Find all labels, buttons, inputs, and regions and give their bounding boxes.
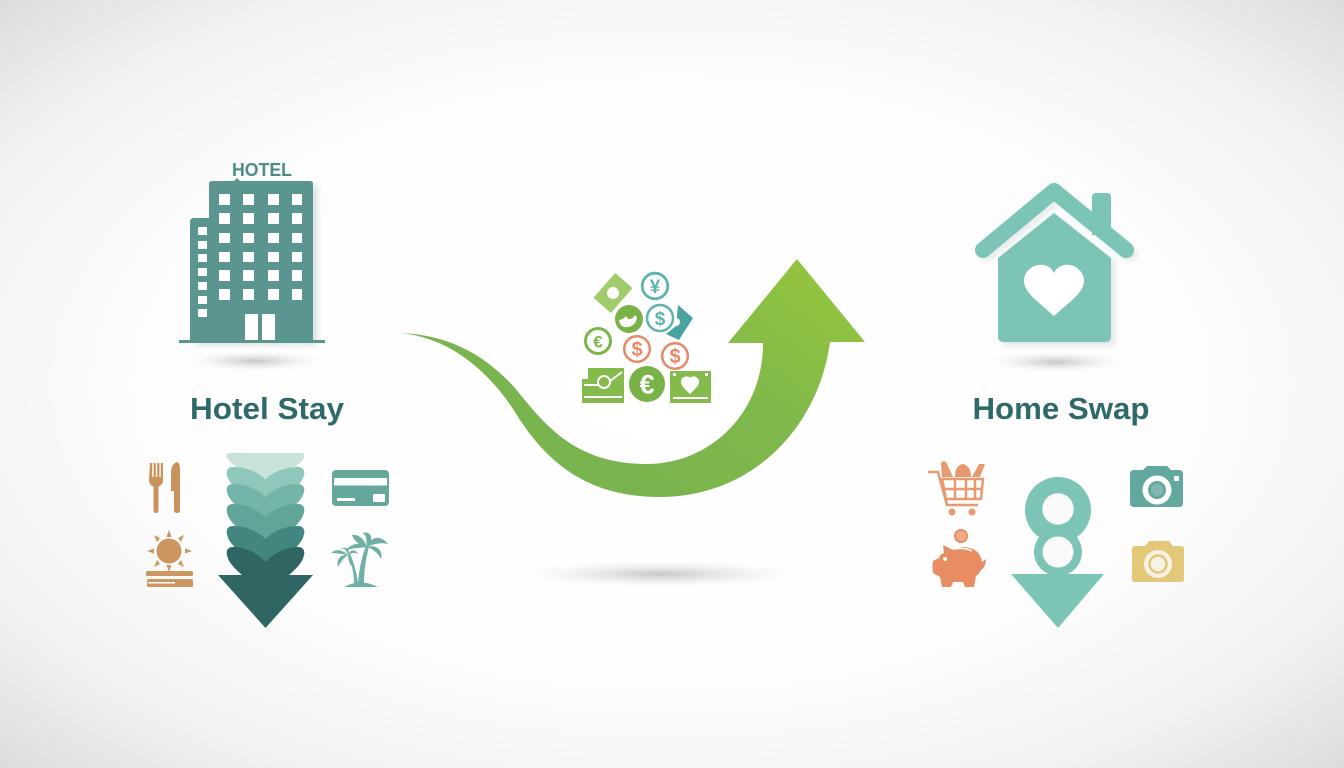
icon: dollar coin teal: $: [655, 309, 666, 330]
icon: palm trees: [331, 532, 388, 587]
panel: hotel stay: [146, 160, 389, 628]
icon group: money and currency: [582, 273, 711, 403]
arrow: rising curved savings arrow: [400, 259, 865, 587]
heading: home swap: Home Swap: [972, 391, 1150, 426]
icon: descending looped arrow: [1011, 477, 1104, 628]
icon: euro coin outline: €: [593, 332, 603, 352]
icon: euro coin solid: €: [639, 370, 655, 400]
icon: piggy bank: [932, 530, 986, 587]
icon: yellow camera: [1132, 541, 1184, 582]
icon: diamond banknote: [593, 273, 633, 313]
icon: dollar coin orange right: $: [669, 346, 681, 368]
icon: shopping cart: [928, 461, 985, 516]
icon: teal banknote: [666, 305, 693, 340]
icon: fork and knife: [149, 462, 180, 513]
icon: hotel building: HOTEL: [232, 160, 292, 180]
icon: house with heart: [983, 191, 1130, 372]
icon: dollar coin orange: $: [631, 339, 643, 361]
icon: teal camera: [1130, 466, 1183, 507]
panel: home swap: [928, 191, 1184, 628]
icon: banknote stack with key: [582, 368, 624, 403]
icon: credit card: [332, 470, 389, 506]
icon: green coin: [615, 305, 643, 333]
icon: yen coin: ¥: [650, 277, 661, 298]
heading: hotel stay: Hotel Stay: [190, 391, 345, 426]
icon: descending layered arrow: [218, 453, 313, 628]
icon: banknote with heart: [670, 371, 711, 403]
icon: sun and beach: [146, 530, 193, 587]
icon: hotel building: [179, 160, 325, 371]
